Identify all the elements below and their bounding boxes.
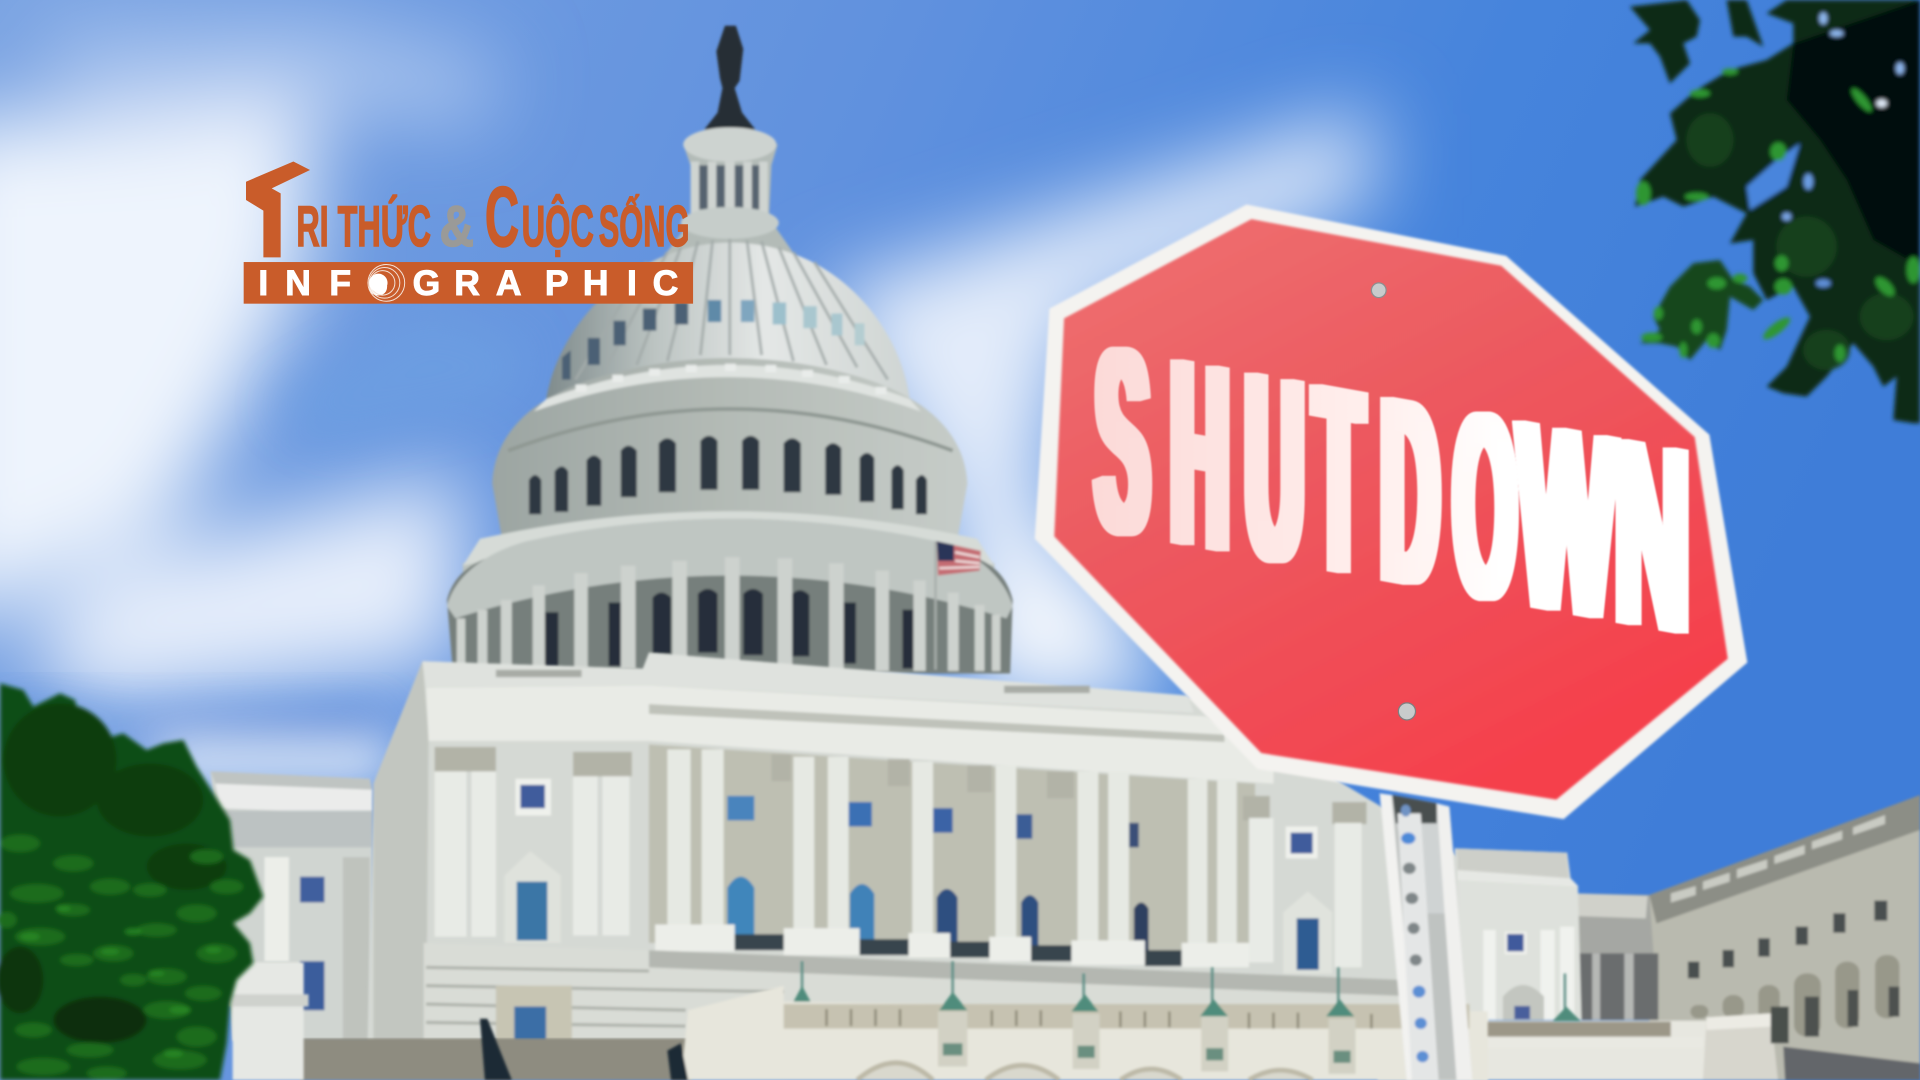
plinth — [424, 943, 1457, 1043]
clouds — [0, 18, 1371, 784]
logo: Tri Thuc & Cuoc Song Infographic — [244, 162, 693, 304]
colonnade drum — [447, 519, 1013, 673]
lower bright leaf cluster — [1640, 260, 1763, 360]
logo wordmark — [296, 169, 689, 265]
facade body — [367, 653, 1457, 1053]
pavilion pilasters — [435, 771, 1362, 967]
sign text SHUTDOWN: SHUTDO — [1096, 290, 1516, 660]
sky gap in the foliage — [1747, 143, 1800, 210]
banner text: O — [369, 274, 388, 301]
logo wordmark: SỐNG — [599, 194, 689, 259]
tree silhouette — [0, 683, 263, 1080]
banner circle emblem — [368, 264, 405, 301]
logo T mark — [246, 162, 310, 257]
mid green foliage — [1687, 113, 1913, 370]
capitals — [435, 747, 1367, 824]
left pedestal — [228, 962, 309, 1080]
lamp posts — [793, 961, 1581, 1074]
lower terrace right — [1471, 1021, 1707, 1080]
main building facade — [367, 653, 1457, 1053]
bottom rivet — [1398, 703, 1416, 720]
left pavilion side wall — [373, 661, 429, 1047]
sign text SHUTDOWN — [1096, 290, 1689, 691]
gap filler behind the post — [1378, 857, 1488, 1080]
dark core of the tree — [1787, 0, 1920, 267]
sign red face — [1054, 219, 1728, 800]
balustrade and roofline — [422, 653, 1194, 713]
logo wordmark: UỘC — [522, 194, 594, 259]
sign text SHUTDOWN: WN — [1518, 365, 1689, 691]
right wing of the building — [1455, 795, 1920, 1080]
windows — [504, 779, 1332, 973]
left tree — [0, 683, 263, 1080]
connector portico — [1574, 893, 1658, 1020]
logo wordmark: RI THỨC — [296, 195, 431, 259]
infographic banner — [244, 262, 693, 304]
wing facade — [1649, 797, 1920, 1080]
logo wordmark: C — [485, 169, 519, 265]
statue on top of the dome — [704, 26, 756, 130]
dome cap — [546, 239, 910, 399]
left wing of the building — [211, 771, 372, 1041]
portico columns — [655, 749, 1249, 967]
logo wordmark: & — [440, 195, 474, 259]
upper drum — [463, 358, 994, 585]
sign post — [1380, 793, 1473, 1080]
sign white border — [1035, 204, 1747, 819]
terrace balustrade — [480, 961, 1581, 1080]
retaining wall — [300, 1038, 692, 1080]
banner text: GRAPHIC — [413, 263, 678, 303]
right pavilion — [1455, 848, 1581, 1020]
flag on the dome — [934, 541, 981, 670]
main foliage mass — [1635, 0, 1920, 423]
top rivet — [1371, 283, 1386, 298]
right tree foliage — [1630, 0, 1920, 423]
banner text: INF — [258, 263, 351, 303]
upper leaf clusters — [1630, 0, 1763, 83]
stop sign — [1035, 204, 1747, 819]
Capitol dome — [447, 26, 1013, 673]
tholos lantern — [665, 127, 795, 255]
portico recess — [649, 744, 1255, 955]
